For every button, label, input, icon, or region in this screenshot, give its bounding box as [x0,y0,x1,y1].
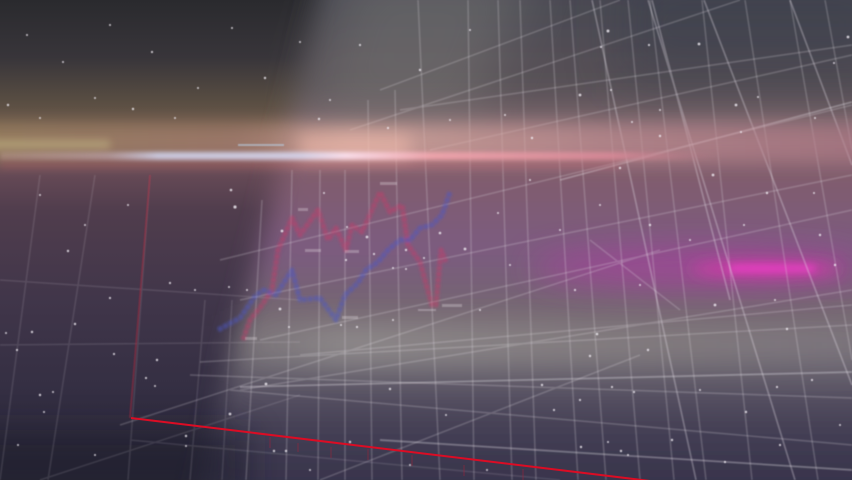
red axis: horizontal baseline with ticks [131,418,650,480]
light streak: magenta flare [530,248,852,288]
light streak: orange pink upper band [0,124,852,168]
blue price line [218,192,450,330]
chart labels: faint white dashes [245,182,462,340]
band: grey horizontal haze [210,326,852,366]
stock chart: red and blue candle lines [218,192,450,340]
red price line [243,192,446,340]
red axis: vertical faint [130,175,150,418]
